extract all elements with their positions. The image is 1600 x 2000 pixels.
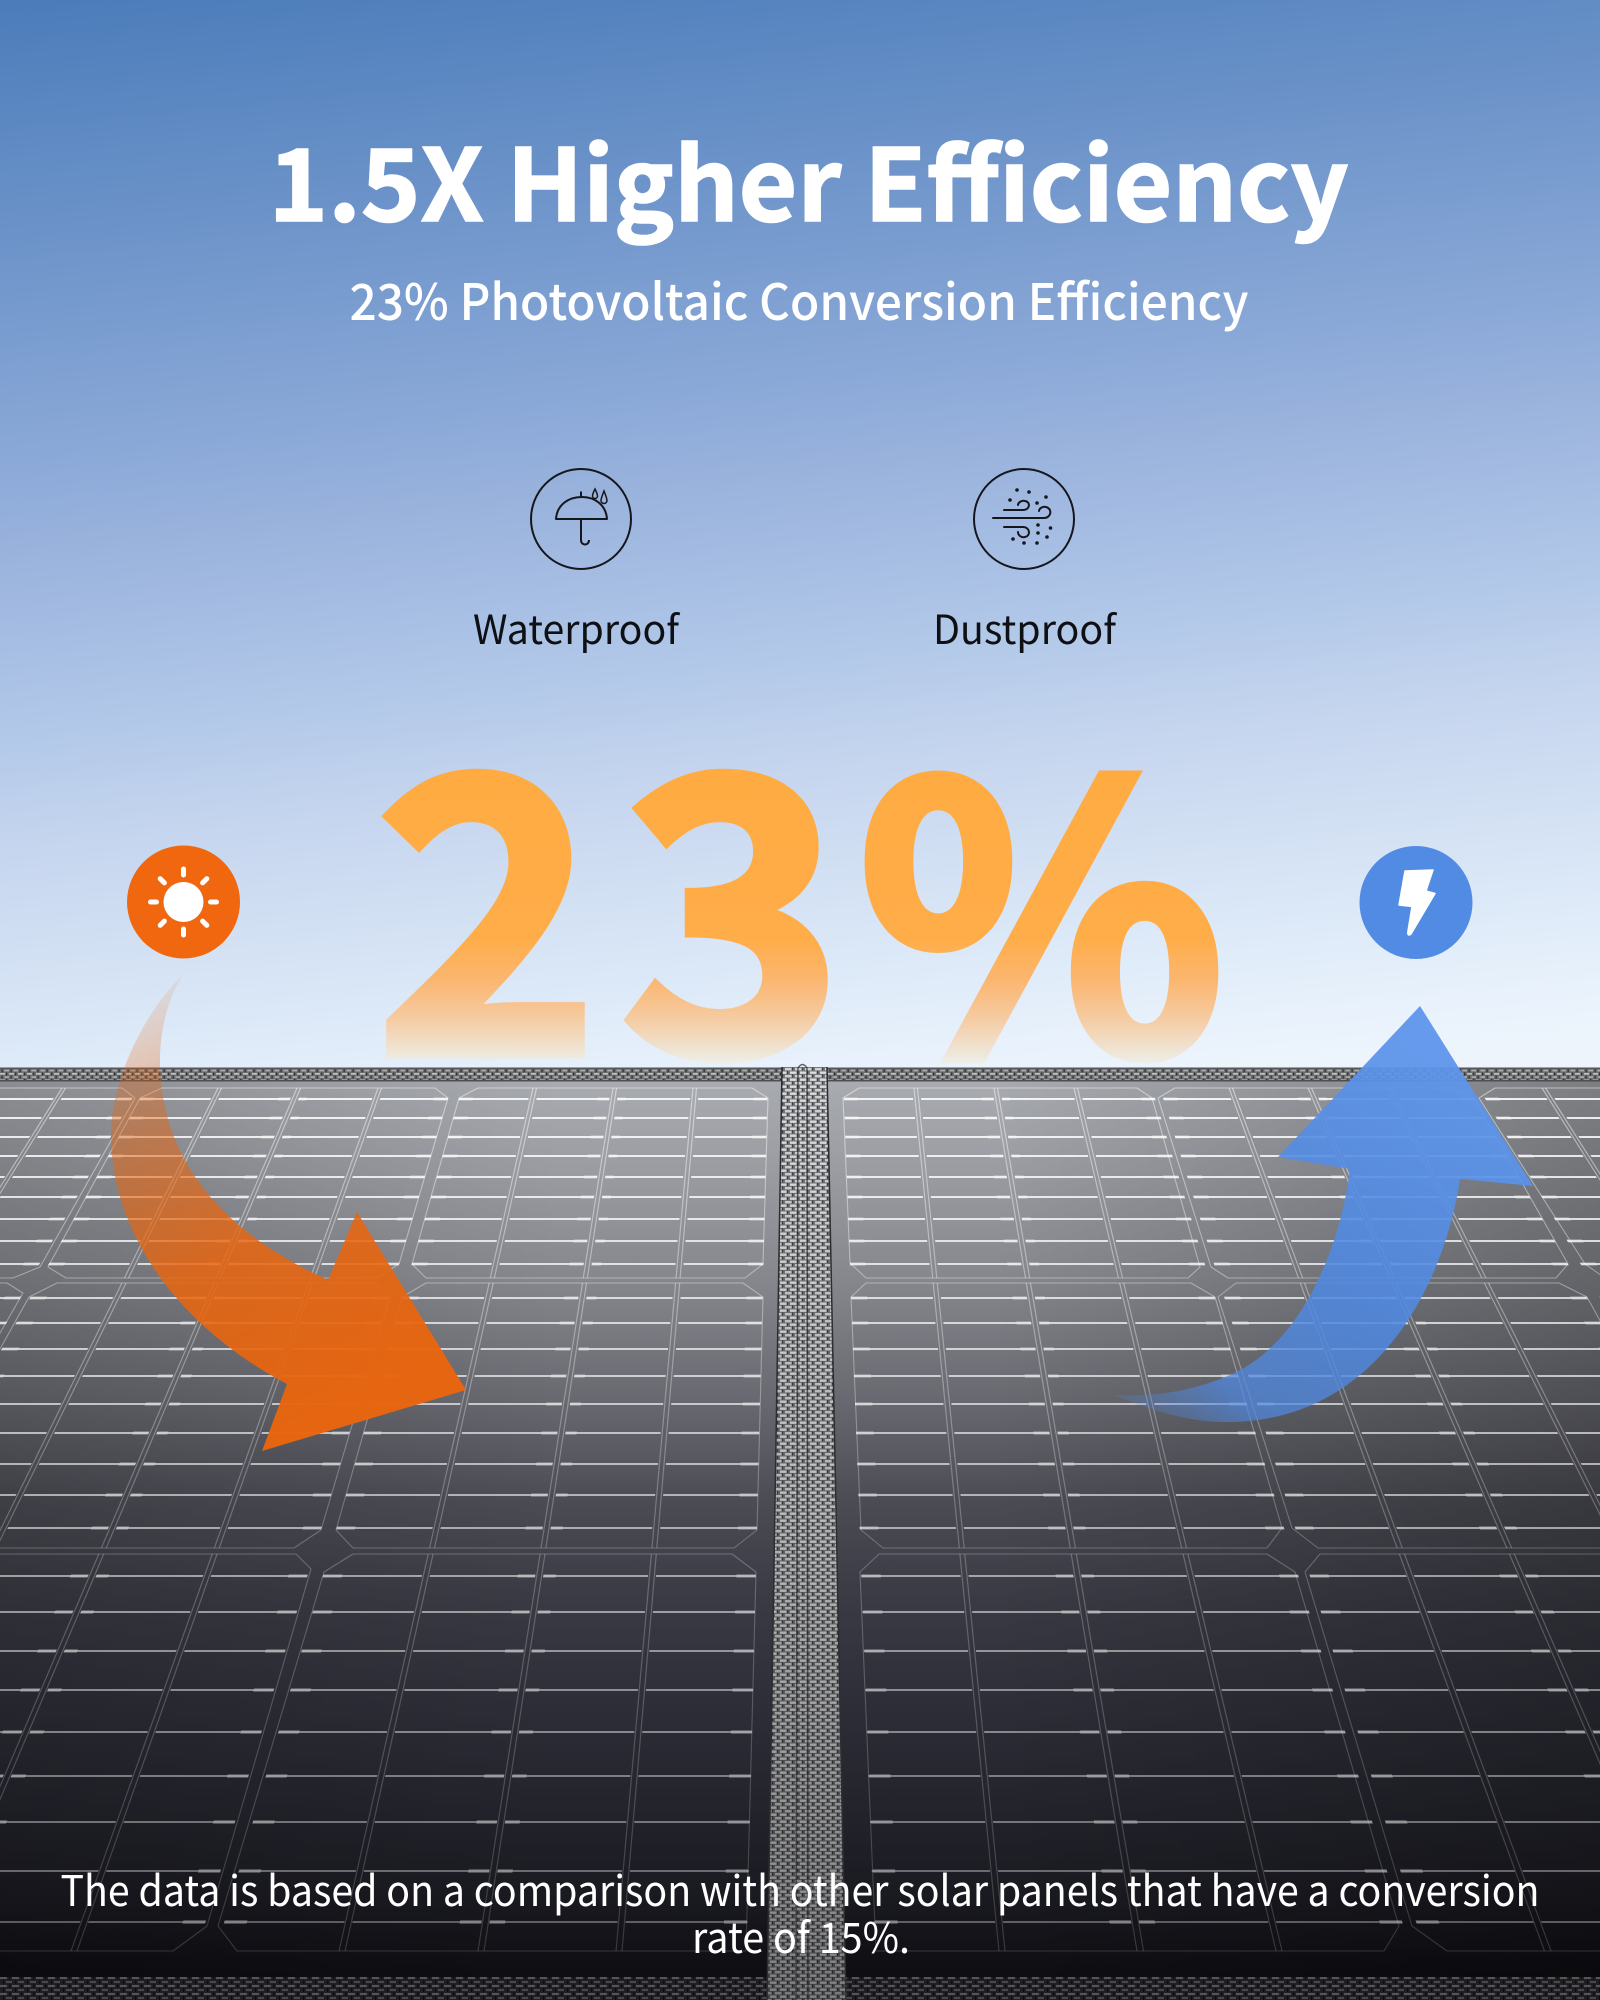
fabric hinge strip: centre <box>767 1064 846 2000</box>
fabric band: top <box>0 1068 1600 1082</box>
panel: solar panel <box>0 1064 1600 2000</box>
icon: lightning bolt <box>1360 846 1472 959</box>
fabric band: bottom <box>0 1977 1600 2000</box>
footnote <box>60 1858 1540 1966</box>
big figure 23%: % <box>857 625 1226 1161</box>
big figure 23% <box>374 612 1226 1165</box>
feature: dustproof <box>933 469 1118 656</box>
footnote: rate of 15%. <box>692 1905 910 1966</box>
cell outlines <box>0 1088 1600 1951</box>
big figure 23%: 3 <box>619 612 845 1165</box>
arrow: energy coming out of panel <box>1113 1006 1533 1422</box>
icon: sun <box>127 846 240 958</box>
label: dustproof: Dustproof <box>933 598 1118 656</box>
feature: waterproof <box>473 469 681 656</box>
big figure 23%: 2 <box>374 612 600 1165</box>
footnote: The data is based on a comparison with other solar panels that have a conversion <box>60 1858 1540 1919</box>
busbar lines <box>0 1099 1600 1922</box>
icon: wind and dust <box>974 469 1074 569</box>
arrow: sunlight going into panel <box>111 975 466 1451</box>
busbar solder ticks <box>0 1099 1600 1922</box>
cell divider lines <box>0 1088 1600 1951</box>
label: waterproof: Waterproof <box>473 598 681 656</box>
sky background <box>0 0 1600 1090</box>
title: 1.5X Higher Efficiency <box>268 105 1348 250</box>
icon: umbrella <box>531 469 631 569</box>
subtitle: 23% Photovoltaic Conversion Efficiency <box>350 263 1248 335</box>
